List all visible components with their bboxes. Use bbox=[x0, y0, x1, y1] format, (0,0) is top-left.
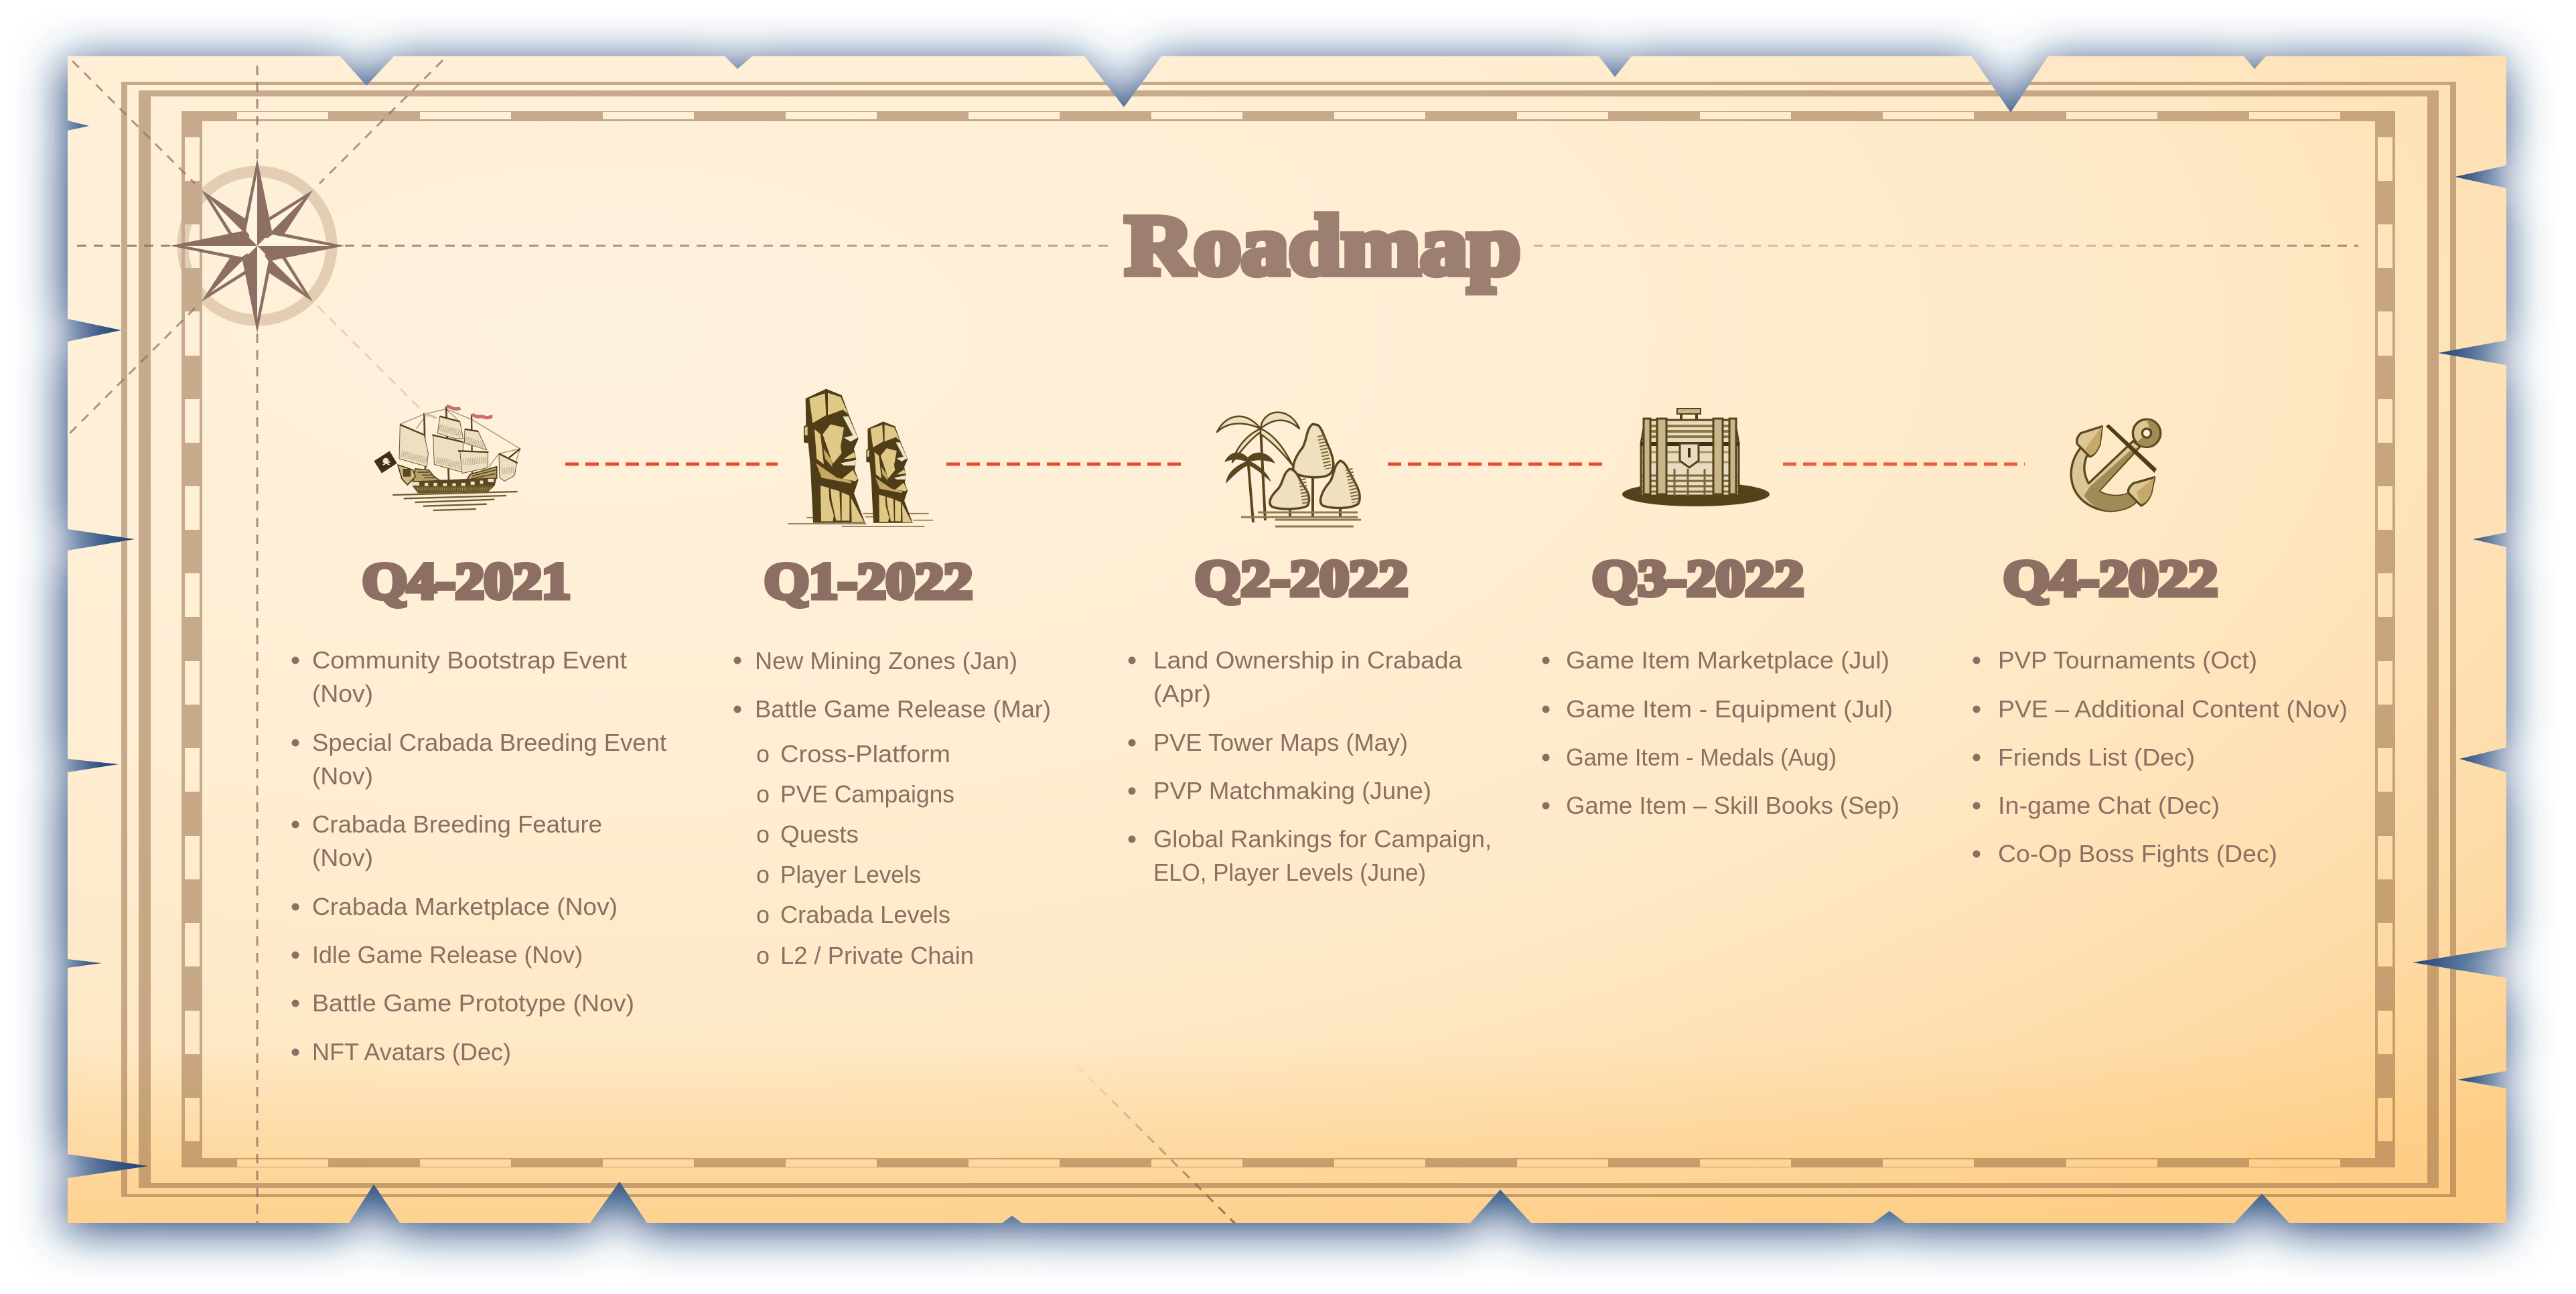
list: Q2-2022 milestones: PVP Matchmaking (June) bbox=[1153, 777, 1431, 804]
list: Q4-2021 milestones: (Nov) bbox=[312, 844, 373, 871]
list: Q1-2022 milestones: o bbox=[756, 942, 770, 969]
list: Q1-2022 milestones: L2 / Private Chain bbox=[780, 942, 974, 969]
list: Q4-2022 milestones: PVE – Additional Content (Nov) bbox=[1998, 695, 2348, 723]
list: Q4-2021 milestones: NFT Avatars (Dec) bbox=[312, 1038, 511, 1066]
list: Q1-2022 milestones: o bbox=[756, 740, 770, 768]
icon: moai statues bbox=[788, 389, 933, 526]
list: Q2-2022 milestones: ELO, Player Levels (June) bbox=[1153, 859, 1426, 886]
list: Q1-2022 milestones bbox=[734, 647, 1051, 969]
list: Q4-2021 milestones: Battle Game Prototype (Nov) bbox=[312, 989, 634, 1017]
list: Q3-2022 milestones: Game Item Marketplace (Jul) bbox=[1566, 646, 1889, 674]
list: Q4-2021 milestones: Idle Game Release (Nov) bbox=[312, 941, 583, 968]
title: Roadmap bbox=[1125, 198, 1520, 293]
list: Q1-2022 milestones: o bbox=[756, 820, 770, 848]
heading: Q2-2022: Q2-2022 bbox=[1195, 551, 1408, 607]
list: Q4-2022 milestones bbox=[1973, 646, 2348, 867]
list: Q4-2022 milestones: Friends List (Dec) bbox=[1998, 743, 2195, 771]
list: Q3-2022 milestones: Game Item – Skill Books (Sep) bbox=[1566, 792, 1900, 819]
heading: Q3-2022: Q3-2022 bbox=[1592, 551, 1804, 607]
icon: compass rose bbox=[170, 159, 344, 333]
list: Q4-2022 milestones: Co-Op Boss Fights (Dec) bbox=[1998, 840, 2277, 867]
heading: Q4-2022: Q4-2022 bbox=[2003, 551, 2218, 607]
list: Q2-2022 milestones: Global Rankings for Campaign, bbox=[1153, 825, 1492, 853]
icon: sailing ship bbox=[374, 406, 520, 510]
list: Q4-2022 milestones: In-game Chat (Dec) bbox=[1998, 792, 2220, 819]
list: Q1-2022 milestones: o bbox=[756, 780, 770, 808]
icon: treasure chest bbox=[1622, 409, 1770, 506]
heading: Q1-2022: Q1-2022 bbox=[764, 553, 973, 609]
heading: Q4-2021: Q4-2021 bbox=[362, 553, 571, 609]
list: Q4-2021 milestones: Community Bootstrap Event bbox=[312, 646, 627, 674]
list: Q1-2022 milestones: o bbox=[756, 901, 770, 928]
list: Q1-2022 milestones: New Mining Zones (Jan) bbox=[755, 647, 1017, 674]
list: Q2-2022 milestones: PVE Tower Maps (May) bbox=[1153, 729, 1408, 756]
timeline connector 3 bbox=[1388, 462, 1602, 466]
list: Q4-2021 milestones: (Nov) bbox=[312, 680, 373, 707]
list: Q3-2022 milestones: Game Item - Equipment (Jul) bbox=[1566, 695, 1893, 723]
list: Q4-2021 milestones bbox=[292, 646, 666, 1066]
list: Q2-2022 milestones: Land Ownership in Crabada bbox=[1153, 646, 1463, 674]
list: Q3-2022 milestones bbox=[1542, 646, 1900, 819]
timeline connector 2 bbox=[946, 462, 1183, 466]
icon: palm trees and forest bbox=[1217, 413, 1361, 526]
list: Q4-2021 milestones: Crabada Breeding Feature bbox=[312, 810, 602, 838]
list: Q1-2022 milestones: Player Levels bbox=[780, 861, 921, 888]
list: Q1-2022 milestones: Quests bbox=[780, 820, 859, 848]
timeline connector 1 bbox=[565, 462, 778, 466]
list: Q4-2021 milestones: Crabada Marketplace (Nov) bbox=[312, 893, 618, 920]
list: Q1-2022 milestones: PVE Campaigns bbox=[780, 780, 954, 808]
list: Q2-2022 milestones: (Apr) bbox=[1153, 680, 1211, 707]
map frame bbox=[121, 82, 2456, 1197]
list: Q1-2022 milestones: Battle Game Release (Mar) bbox=[755, 695, 1051, 723]
list: Q1-2022 milestones: Cross-Platform bbox=[780, 740, 950, 768]
list: Q1-2022 milestones: Crabada Levels bbox=[780, 901, 950, 928]
icon: anchor bbox=[2071, 419, 2161, 511]
list: Q4-2021 milestones: Special Crabada Breeding Event bbox=[312, 729, 666, 756]
timeline connector 4 bbox=[1783, 462, 2025, 466]
list: Q3-2022 milestones: Game Item - Medals (Aug) bbox=[1566, 743, 1837, 771]
list: Q4-2021 milestones: (Nov) bbox=[312, 762, 373, 790]
list: Q4-2022 milestones: PVP Tournaments (Oct) bbox=[1998, 646, 2257, 674]
list: Q1-2022 milestones: o bbox=[756, 861, 770, 888]
list: Q2-2022 milestones bbox=[1128, 646, 1492, 886]
